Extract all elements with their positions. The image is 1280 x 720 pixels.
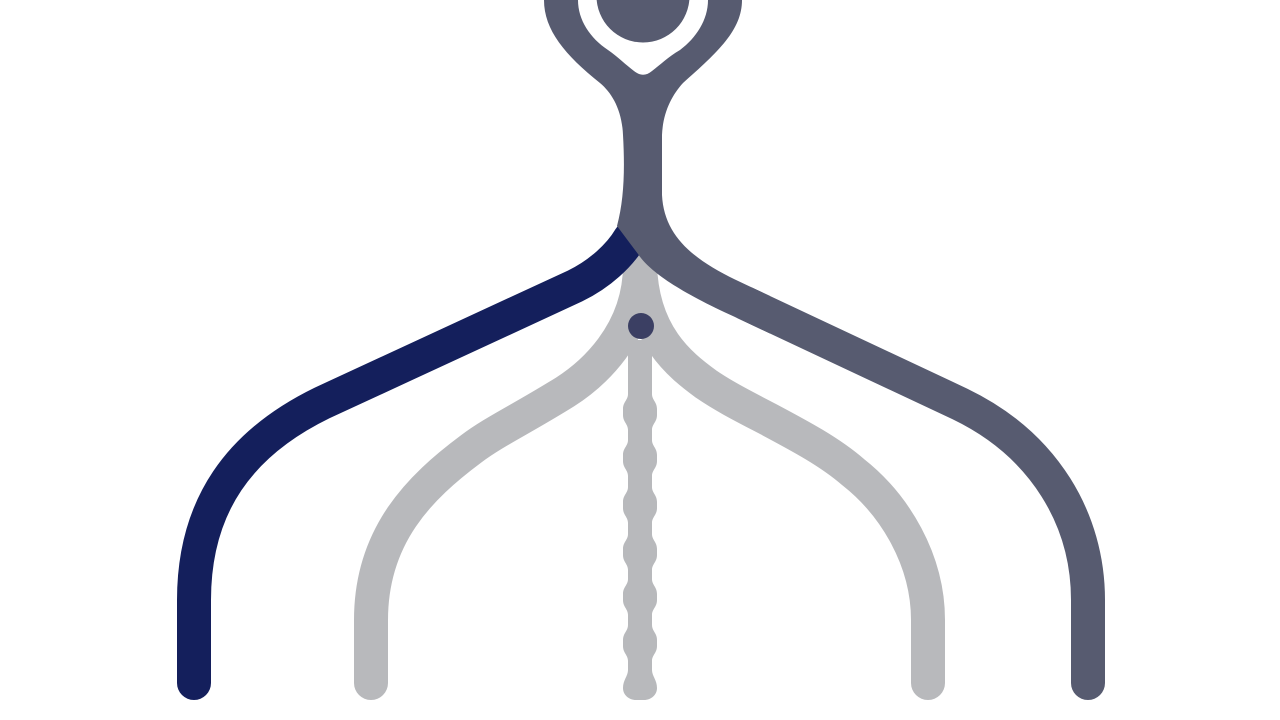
dark junction dot — [628, 313, 654, 339]
light grey left branch — [371, 265, 640, 683]
slate right branch — [745, 303, 1088, 683]
slate ring head, neck and junction — [544, 0, 770, 334]
light grey centre beaded stem — [623, 340, 657, 700]
slate inner disc — [596, 0, 690, 42]
light grey right branch — [640, 265, 928, 683]
navy left branch — [194, 238, 630, 683]
